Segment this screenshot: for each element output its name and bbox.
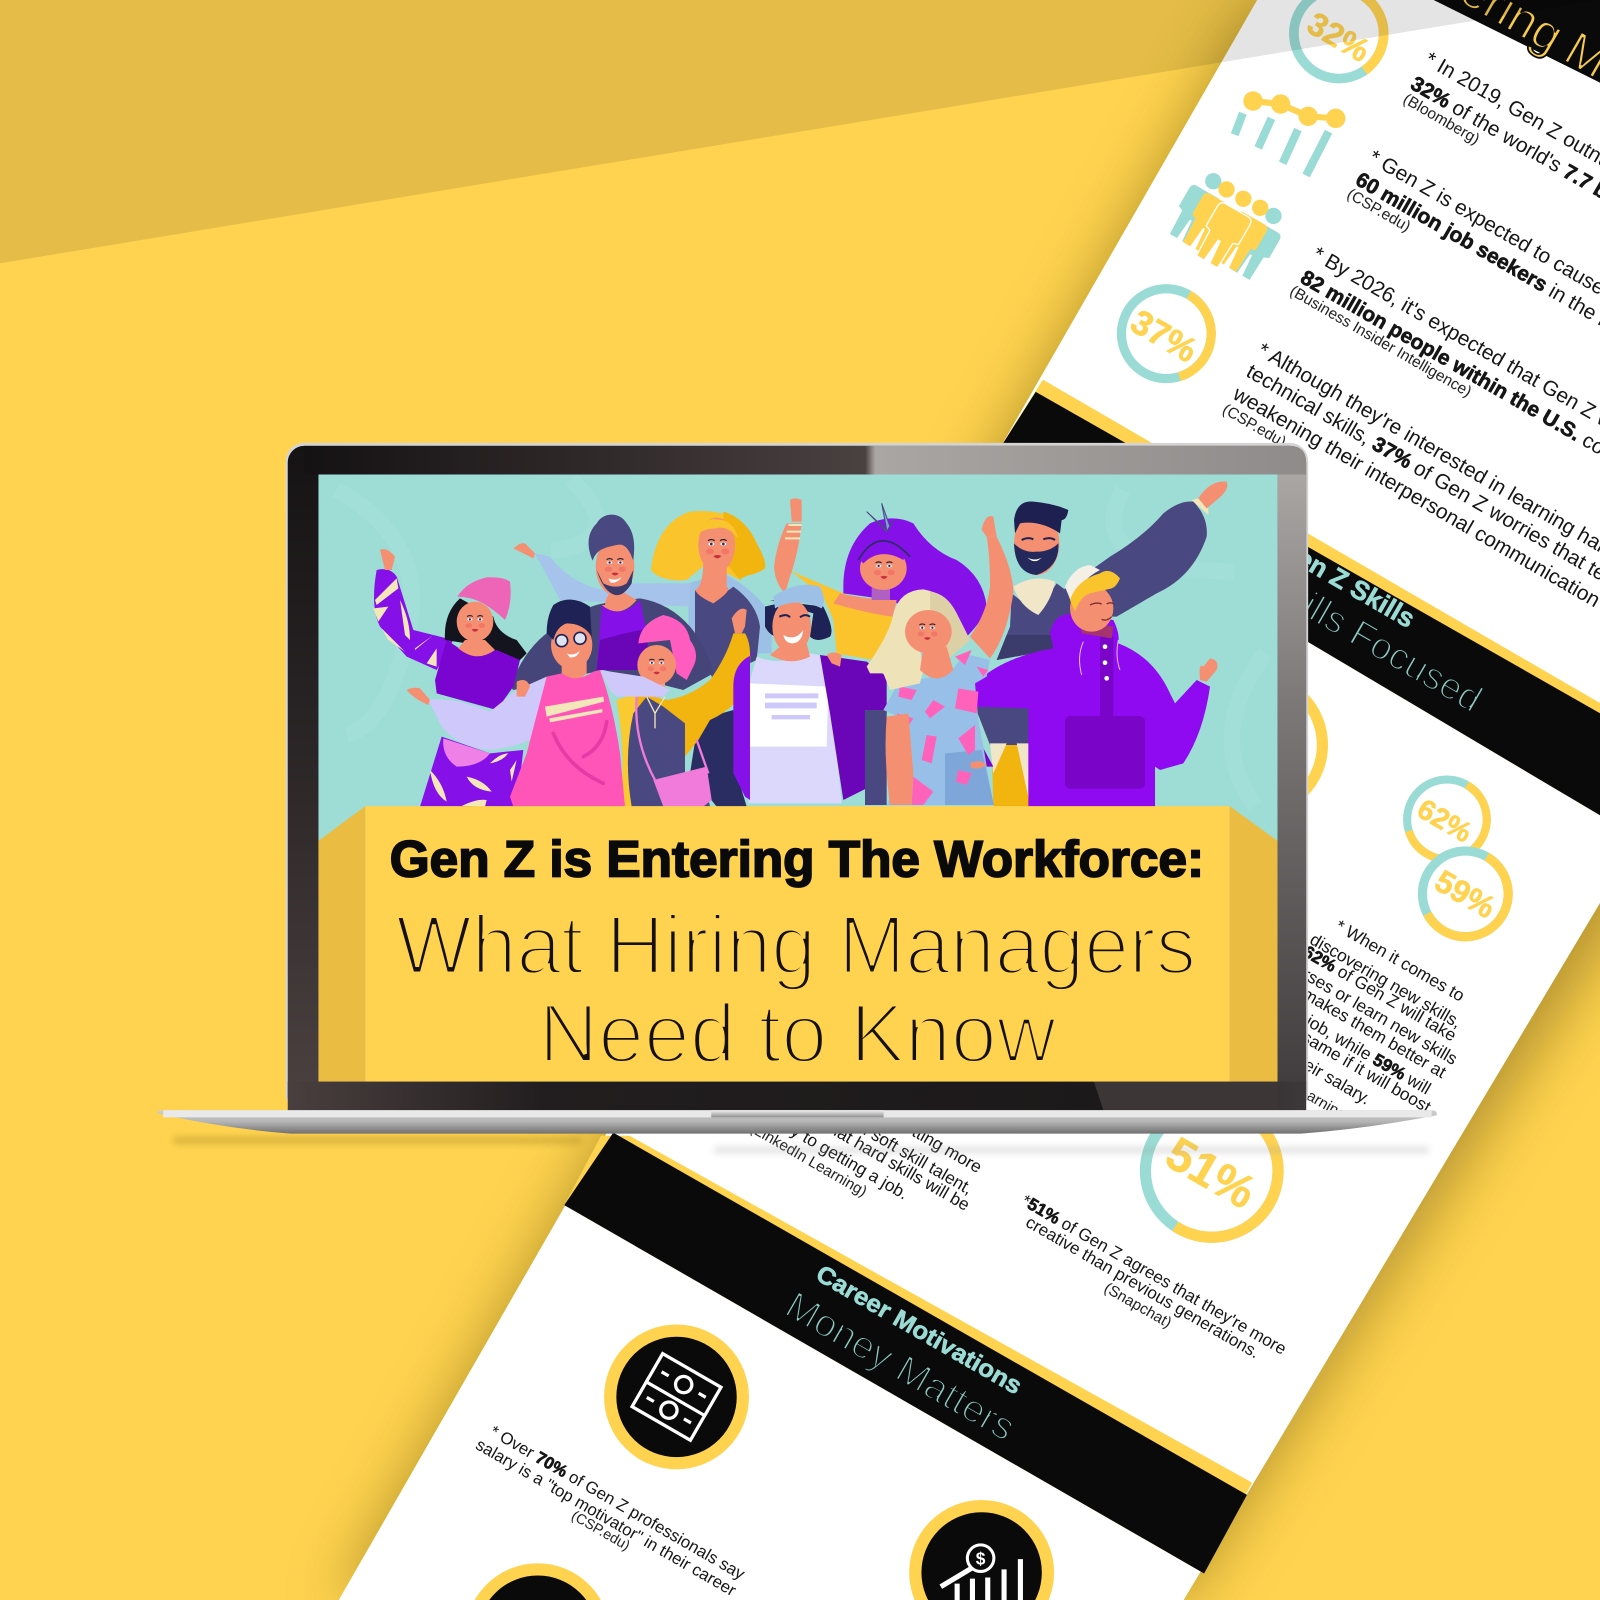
boy with glasses and pink shirt: [407, 600, 670, 807]
text block: discovering new skills: discovering new skills,: [1307, 929, 1465, 1032]
text block: discovering new skills: their job, while 59% will: [1269, 991, 1435, 1098]
text block: discovering new skills: [1231, 915, 1468, 1126]
text block: soft skill talent: but feel that hard skills will be: [768, 1085, 973, 1215]
text block: 51 percent creative: *51% of Gen Z agrees that they're more: [1018, 1190, 1290, 1359]
overlay: angled shadow wedge: [0, 0, 1600, 263]
pink haired girl with yellow coat: [617, 609, 750, 807]
laptop: [157, 443, 1437, 1153]
text block: 32 percent: (Bloomberg): [1400, 91, 1482, 148]
blonde woman with blue dress: [865, 589, 994, 805]
text block: soft skill talent: (LinkedIn Learning): [747, 1120, 870, 1200]
text block: salary motivator: * Over 70% of Gen Z professionals say: [487, 1422, 749, 1584]
woman with purple hair: [774, 498, 987, 660]
text block: salary motivator: salary is a "top motivator" in their career: [472, 1435, 740, 1600]
yellow title box: [318, 806, 1278, 1082]
section band: Gen Z skills: [995, 380, 1600, 815]
donut: 59%: [1407, 835, 1524, 952]
laptop lid: [286, 443, 1308, 1113]
icon: partly visible badge: [471, 1569, 604, 1600]
text block: discovering new skills: their salary.: [1288, 1047, 1374, 1109]
text block: discovering new skills: if it makes them better at: [1276, 970, 1450, 1082]
text block: 37 percent: (CSP.edu): [1219, 401, 1289, 451]
paper shadow: [339, 0, 1600, 1600]
text block: 51 percent creative: creative than previous generations.: [1022, 1212, 1263, 1362]
laptop base: [157, 1110, 1437, 1134]
icon: growth chart: [915, 1506, 1048, 1600]
text block: discovering new skills: (LinkedIn Learning): [1231, 1045, 1353, 1126]
subtitle line two: Need to Know: [539, 986, 1057, 1080]
section band: career motivations: Career Motivations: [811, 1260, 1026, 1400]
text block: soft skill talent: interested in soft skill talent,: [782, 1075, 976, 1198]
boy in purple hoodie: [975, 565, 1218, 807]
section band: career motivations: Money Matters: [778, 1284, 1022, 1450]
illustration: group of young people: [373, 482, 1227, 807]
text block: soft skill talent: [747, 1047, 986, 1215]
icon: group of people: [1165, 165, 1293, 283]
panel: infographic page: [339, 0, 1600, 1600]
text block: discovering new skills: 62% of Gen Z will take: [1300, 941, 1460, 1045]
donut: 51%: 51%: [1157, 1127, 1265, 1219]
section band: Gen Z skills: Gen Z Skills: [1274, 532, 1420, 634]
text block: discovering new skills: * When it comes to: [1332, 915, 1468, 1006]
icon: population line chart: [1235, 91, 1345, 176]
boy with blue hat and white shirt: [733, 585, 887, 803]
donut: 62%: 62%: [1412, 793, 1477, 849]
text block: discovering new skills: do the same if it will boost: [1253, 1000, 1435, 1117]
title: Gen Z is Entering The Workforce:: [390, 831, 1204, 888]
donut: 59%: 59%: [1429, 863, 1502, 925]
blonde woman at back: [651, 511, 772, 680]
screen background: [318, 474, 1278, 1082]
text block: soft skill talent: key to getting a job.: [772, 1111, 912, 1203]
screen: [318, 474, 1278, 1082]
text block: salary motivator: (CSP.edu): [568, 1508, 632, 1554]
donut: 32%: 32%: [1301, 4, 1376, 69]
laptop shadow: [173, 1137, 1429, 1153]
text block: 82 million: (Business Insider Intelligence): [1287, 283, 1474, 401]
subtitle line one: What Hiring Managers: [396, 897, 1196, 991]
donut: partly hidden ring: [1188, 678, 1322, 812]
header band: outnumbering millennials: [1277, 0, 1600, 183]
donut: 32%: [1277, 0, 1400, 95]
donut: 62%: [1393, 765, 1501, 874]
donut: 37%: 37%: [1124, 303, 1203, 371]
text block: 60 million: (CSP.edu): [1344, 186, 1413, 236]
man with blue sleeve: [510, 515, 713, 690]
text block: discovering new skills: courses or learn new skills: [1275, 950, 1461, 1069]
text block: 51 percent creative: (Snapchat): [1101, 1280, 1174, 1332]
donut: 51%: [1121, 1080, 1302, 1262]
section band: Gen Z skills: Skills Focused: [1258, 562, 1489, 720]
woman with pink beanie: [373, 549, 527, 807]
donut: 37%: [1105, 272, 1228, 395]
section band: career motivations: [564, 1133, 1252, 1573]
icon: growth chart: $: [976, 1548, 986, 1568]
icon: money: [610, 1331, 743, 1463]
bearded man: [970, 482, 1227, 807]
page sheet: [339, 0, 1600, 1600]
text block: soft skill talent: * Employers are getting more: [781, 1047, 986, 1177]
